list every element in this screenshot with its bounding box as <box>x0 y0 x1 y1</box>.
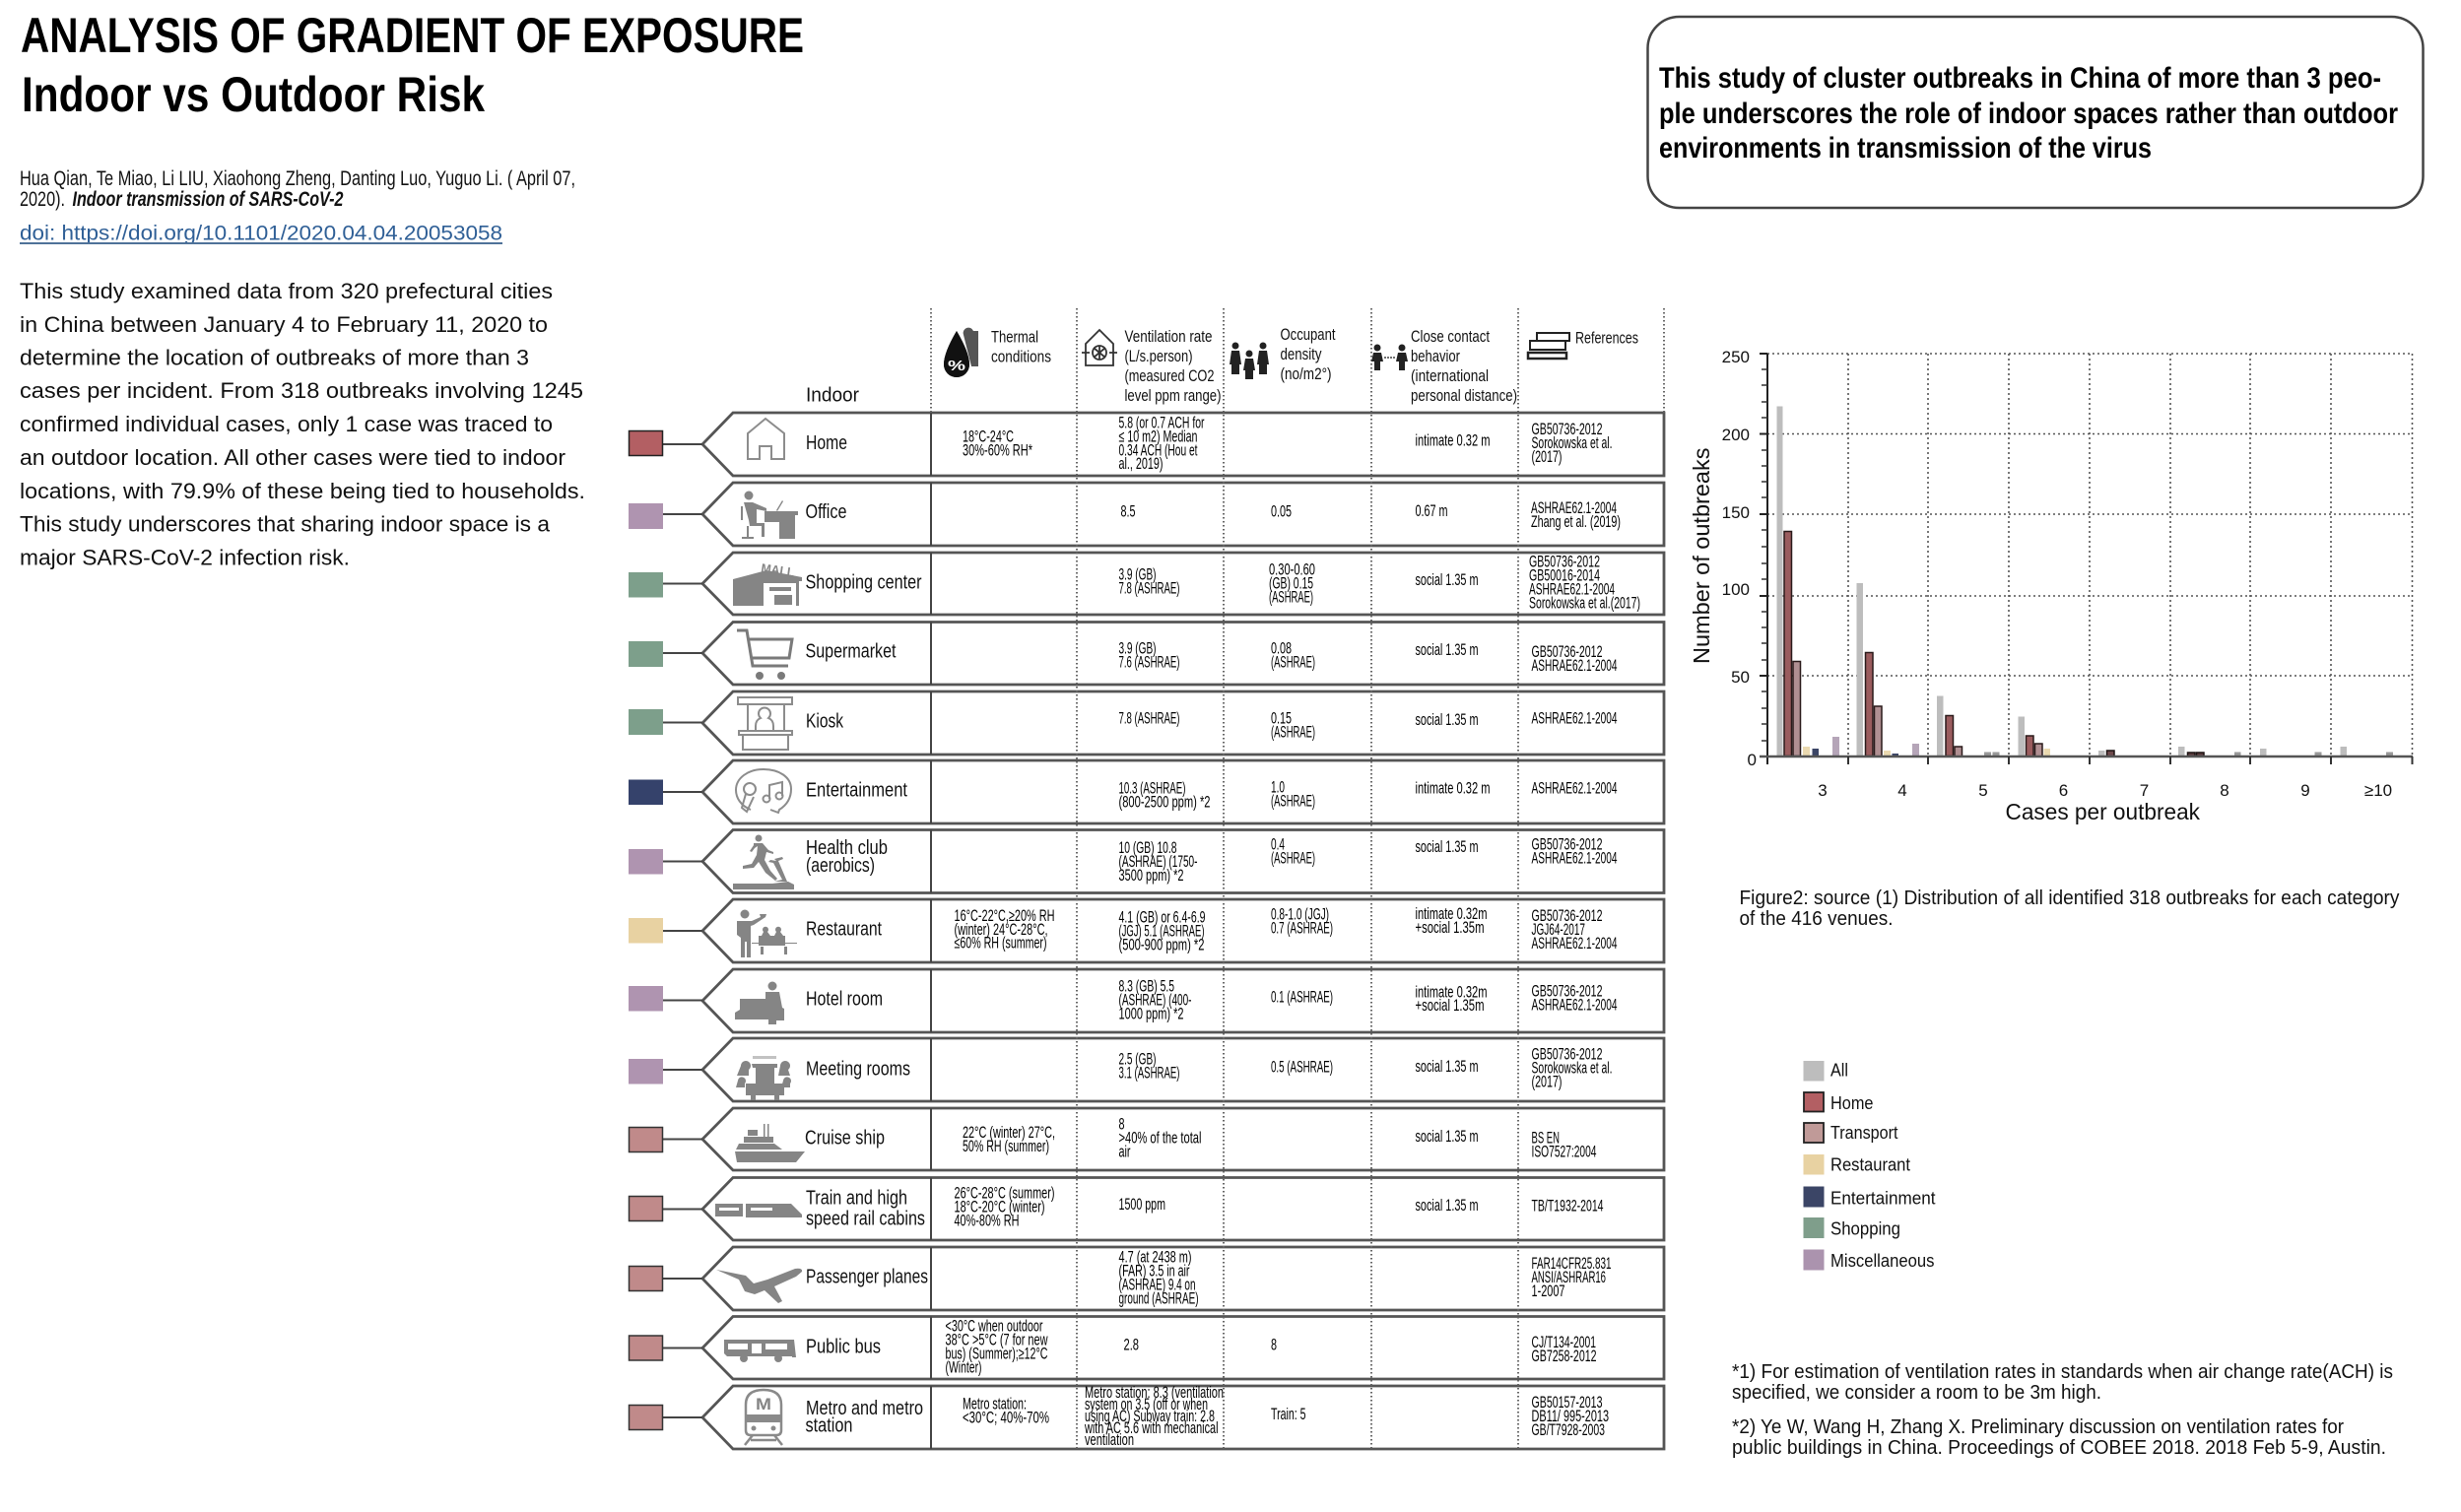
row: metro and metro station: Train: 5 <box>1271 1406 1306 1423</box>
y axis labels: 250 <box>1722 348 1750 366</box>
row: passenger planes: FAR14CFR25.831 <box>1531 1255 1612 1273</box>
row: train and high speed rail cabins: 18°C-20°C (winter) <box>954 1198 1044 1216</box>
header: occupant density: density <box>1281 345 1322 363</box>
header: thermal conditions <box>991 327 1051 366</box>
row: home: 30%-60% RH* <box>963 441 1032 459</box>
figure caption: of the 416 venues. <box>1740 908 1894 930</box>
row: meeting rooms: Sorokowska et al. <box>1531 1060 1612 1078</box>
title <box>21 8 804 122</box>
x axis labels: ≥10 <box>2364 781 2392 800</box>
bars: 7 cases <box>2098 751 2114 756</box>
row: kiosk: 7.8 (ASHRAE) <box>1119 709 1180 727</box>
row: metro and metro station <box>629 1384 1664 1449</box>
row: office: 0.05 <box>1271 502 1292 520</box>
y axis labels: 200 <box>1722 426 1750 444</box>
row: supermarket: social 1.35 m <box>1415 641 1478 659</box>
text block: study summary: determine the location of outbreaks of more than 3 <box>20 345 529 370</box>
text block: study summary: major SARS-CoV-2 infection risk. <box>20 546 350 569</box>
row: passenger planes: ANSI/ASHRAR16 <box>1531 1269 1606 1286</box>
header: thermal conditions: Thermal <box>991 327 1038 347</box>
row: public bus: bus) (Summer);≥12°C <box>946 1346 1048 1363</box>
row: office: Office <box>806 501 847 523</box>
row: shopping center: Shopping center <box>806 571 922 593</box>
row: entertainment: Entertainment <box>806 780 907 802</box>
row: supermarket: 7.6 (ASHRAE) <box>1119 654 1180 672</box>
row: restaurant: JGJ64-2017 <box>1531 921 1585 939</box>
header: references: References <box>1575 329 1638 347</box>
row: shopping center: MALL <box>761 560 795 580</box>
bar chart: outbreaks by cases per outbreak <box>1689 348 2413 824</box>
row: metro and metro station: DB11/ 995-2013 <box>1531 1408 1609 1425</box>
x axis labels: 7 <box>2140 781 2149 800</box>
row: shopping center: social 1.35 m <box>1415 571 1478 589</box>
row: entertainment: 10.3 (ASHRAE) <box>1119 780 1186 798</box>
row: passenger planes: ground (ASHRAE) <box>1119 1290 1198 1308</box>
row: kiosk: (ASHRAE) <box>1271 723 1315 741</box>
row: restaurant: GB50736-2012 <box>1531 907 1602 925</box>
row: train and high speed rail cabins: speed rail cabins <box>806 1208 925 1229</box>
row: metro and metro station: GB50157-2013 <box>1531 1394 1602 1412</box>
row: meeting rooms: 2.5 (GB) <box>1119 1050 1157 1068</box>
header: ventilation rate: (measured CO2 <box>1125 366 1214 385</box>
row: hotel room: intimate 0.32m <box>1415 983 1488 1001</box>
title: Indoor vs Outdoor Risk <box>22 67 485 122</box>
row: supermarket: 3.9 (GB) <box>1119 640 1157 658</box>
row: entertainment: 1.0 <box>1271 778 1285 796</box>
row: metro and metro station: <30°C; 40%-70% <box>963 1409 1049 1426</box>
legend <box>1803 1060 1935 1271</box>
row: home: 5.8 (or 0.7 ACH for <box>1119 414 1205 431</box>
row: restaurant: +social 1.35m <box>1415 919 1484 937</box>
header: ventilation rate: (L/s.person) <box>1125 347 1192 365</box>
row: hotel room: (ASHRAE) (400- <box>1119 991 1192 1009</box>
footnote 2: *2) Ye W, Wang H, Zhang X. Preliminary discussion on ventilation rates for <box>1732 1416 2344 1438</box>
row: shopping center: ASHRAE62.1-2004 <box>1529 581 1615 599</box>
row: home: al., 2019) <box>1119 455 1163 473</box>
row: health club: 10 (GB) 10.8 <box>1119 839 1176 857</box>
row: train and high speed rail cabins <box>629 1178 1664 1240</box>
footnote 1: *1) For estimation of ventilation rates in standards when air change rate(ACH) is <box>1732 1361 2393 1383</box>
row: entertainment: ASHRAE62.1-2004 <box>1531 780 1618 798</box>
row: meeting rooms: (2017) <box>1531 1074 1563 1091</box>
citation: 2020). <box>20 188 65 211</box>
icon: thermal conditions: % <box>948 358 965 374</box>
footnote 2: public buildings in China. Proceedings of COBEE 2018. 2018 Feb 5-9, Austin. <box>1732 1437 2386 1459</box>
bars: 4 cases <box>1856 583 1919 756</box>
text block: study summary: an outdoor location. All other cases were tied to indoor <box>20 445 566 470</box>
row: public bus: 38°C >5°C (7 for new <box>946 1332 1048 1349</box>
icon: books <box>1528 333 1569 359</box>
row: restaurant: intimate 0.32m <box>1415 905 1488 923</box>
row: restaurant <box>629 899 1664 962</box>
row: health club: (aerobics) <box>806 855 875 877</box>
row: home: 0.34 ACH (Hou et <box>1119 441 1198 459</box>
row: shopping center: 3.9 (GB) <box>1119 565 1157 583</box>
row: cruise ship: 50% RH (summer) <box>963 1138 1049 1155</box>
row: home: Home <box>806 432 847 454</box>
row: cruise ship: BS EN <box>1531 1129 1560 1147</box>
row: metro and metro station: with AC 5.6 with mechanical <box>1084 1419 1218 1437</box>
row: kiosk: 0.15 <box>1271 709 1292 727</box>
row: hotel room: 8.3 (GB) 5.5 <box>1119 977 1174 995</box>
row: train and high speed rail cabins: Train and high <box>806 1188 907 1210</box>
row: metro and metro station: Metro and metro <box>806 1398 923 1419</box>
row: passenger planes: (ASHRAE) 9.4 on <box>1119 1277 1196 1294</box>
header: occupant density <box>1281 325 1336 383</box>
legend item: shopping: Shopping <box>1830 1219 1900 1239</box>
row: hotel room: Hotel room <box>806 989 883 1011</box>
header: close contact behavior: personal distance) <box>1411 386 1517 405</box>
row: metro and metro station: GB/T7928-2003 <box>1531 1421 1605 1439</box>
row: public bus: <30°C when outdoor <box>946 1318 1043 1336</box>
row: train and high speed rail cabins: social 1.35 m <box>1415 1197 1478 1215</box>
header: thermal conditions: conditions <box>991 347 1051 366</box>
row: public bus: GB7258-2012 <box>1531 1348 1596 1365</box>
legend item: all: All <box>1830 1060 1848 1080</box>
row: restaurant: 0.7 (ASHRAE) <box>1271 920 1333 938</box>
citation <box>20 167 575 211</box>
bars: 3 cases <box>1777 406 1839 756</box>
figure caption <box>1740 887 2400 930</box>
row: health club: 0.4 <box>1271 835 1285 853</box>
row: shopping center: 7.8 (ASHRAE) <box>1119 579 1180 597</box>
row: supermarket: GB50736-2012 <box>1531 643 1602 661</box>
footnote 1: specified, we consider a room to be 3m high. <box>1732 1382 2101 1404</box>
row: restaurant: (500-900 ppm) *2 <box>1119 936 1204 953</box>
row: cruise ship <box>629 1108 1664 1170</box>
row: office: 8.5 <box>1121 502 1135 520</box>
row: restaurant: ASHRAE62.1-2004 <box>1531 935 1618 953</box>
footnote 1 <box>1732 1361 2393 1404</box>
footnote 2 <box>1732 1416 2386 1459</box>
row: restaurant: 16°C-22°C,≥20% RH <box>954 907 1054 925</box>
header: ventilation rate: Ventilation rate <box>1125 327 1212 346</box>
legend item: all <box>1803 1060 1848 1082</box>
legend item: restaurant: Restaurant <box>1830 1154 1910 1174</box>
row: restaurant: 4.1 (GB) or 6.4-6.9 <box>1119 908 1206 926</box>
row: supermarket: 0.08 <box>1271 640 1292 658</box>
row: meeting rooms: 0.5 (ASHRAE) <box>1271 1058 1333 1076</box>
row: train and high speed rail cabins: TB/T1932-2014 <box>1531 1198 1604 1216</box>
legend item: shopping <box>1803 1217 1900 1239</box>
text block: study summary: locations, with 79.9% of these being tied to households. <box>20 479 585 503</box>
bars: 8 cases <box>2178 747 2240 756</box>
row: public bus: CJ/T134-2001 <box>1531 1334 1596 1351</box>
row: hotel room: 1000 ppm) *2 <box>1119 1005 1184 1022</box>
row: kiosk: Kiosk <box>806 711 844 733</box>
row: passenger planes <box>629 1247 1664 1310</box>
row: meeting rooms: Meeting rooms <box>806 1058 910 1080</box>
row: shopping center: 0.30-0.60 <box>1269 561 1315 579</box>
row: cruise ship: air <box>1119 1143 1131 1160</box>
row: home: ≤ 10 m2) Median <box>1119 427 1198 445</box>
header: close contact behavior <box>1411 327 1517 405</box>
header: close contact behavior: (international <box>1411 366 1489 385</box>
icon: close contact <box>1371 345 1408 370</box>
row: cruise ship: social 1.35 m <box>1415 1128 1478 1146</box>
row: restaurant: (winter) 24°C-28°C, <box>954 921 1048 939</box>
row: public bus: 2.8 <box>1123 1336 1139 1353</box>
citation: Indoor transmission of SARS-CoV-2 <box>73 188 344 211</box>
row: metro and metro station: ventilation <box>1085 1431 1134 1449</box>
x axis labels: 3 <box>1818 781 1828 800</box>
row: meeting rooms: 3.1 (ASHRAE) <box>1119 1064 1180 1082</box>
row: entertainment: (ASHRAE) <box>1271 792 1315 810</box>
row: home: Sorokowska et al. <box>1531 434 1612 452</box>
row: meeting rooms <box>629 1038 1664 1101</box>
x axis title: Cases per outbreak <box>2006 799 2200 824</box>
row: restaurant: Restaurant <box>806 918 882 940</box>
row: supermarket: (ASHRAE) <box>1271 654 1315 672</box>
x axis labels: 6 <box>2059 781 2068 800</box>
row: shopping center <box>629 553 1664 615</box>
row: public bus: Public bus <box>806 1336 881 1357</box>
row: kiosk: social 1.35 m <box>1415 711 1478 729</box>
header: close contact behavior: behavior <box>1411 347 1460 365</box>
row: restaurant: (JGJ) 5.1 (ASHRAE) <box>1119 922 1204 940</box>
row: kiosk <box>629 691 1664 755</box>
row: kiosk: ASHRAE62.1-2004 <box>1531 709 1618 727</box>
legend item: miscellaneous <box>1803 1249 1935 1271</box>
row: cruise ship: >40% of the total <box>1119 1129 1202 1147</box>
row: supermarket: Supermarket <box>806 640 897 662</box>
row: restaurant: ≤60% RH (summer) <box>954 934 1046 952</box>
row: shopping center: GB50016-2014 <box>1529 567 1600 585</box>
icon: occupants <box>1230 343 1269 379</box>
callout <box>1647 17 2424 208</box>
row: cruise ship: Cruise ship <box>805 1127 885 1149</box>
row: restaurant: 0.8-1.0 (JGJ) <box>1271 906 1329 924</box>
row: passenger planes: (FAR) 3.5 in air <box>1119 1263 1190 1281</box>
text block: study summary <box>20 279 585 569</box>
row: home <box>629 413 1664 476</box>
row: health club: (ASHRAE) (1750- <box>1119 853 1198 871</box>
row: home: GB50736-2012 <box>1531 421 1602 438</box>
row: health club: ASHRAE62.1-2004 <box>1531 849 1618 867</box>
row: cruise ship: ISO7527:2004 <box>1531 1143 1596 1160</box>
bars: 10 or more cases <box>2341 747 2393 756</box>
text block: study summary: This study examined data from 320 prefectural cities <box>20 279 553 303</box>
row: home: intimate 0.32 m <box>1415 431 1490 449</box>
x axis labels: 8 <box>2220 781 2229 800</box>
text block: study summary: cases per incident. From 318 outbreaks involving 1245 <box>20 378 583 403</box>
legend item: entertainment <box>1803 1186 1935 1208</box>
row: office: Zhang et al. (2019) <box>1531 513 1621 531</box>
row: office: 0.67 m <box>1415 502 1448 520</box>
icon: ventilation house <box>1082 330 1117 365</box>
citation: Hua Qian, Te Miao, Li LIU, Xiaohong Zheng, Danting Luo, Yuguo Li. ( April 07, <box>20 167 575 190</box>
bars: 6 cases <box>2018 717 2050 756</box>
row: metro and metro station: Metro station: 8.3 (ventilation <box>1085 1384 1224 1402</box>
header: ventilation rate <box>1125 327 1222 405</box>
row: hotel room <box>629 969 1664 1032</box>
row: metro and metro station: station <box>806 1414 853 1436</box>
row: home: 18°C-24°C <box>963 427 1014 445</box>
figure caption: Figure2: source (1) Distribution of all identified 318 outbreaks for each category <box>1740 887 2400 909</box>
x axis labels: 5 <box>1978 781 1988 800</box>
legend item: transport <box>1804 1123 1897 1143</box>
legend item: entertainment: Entertainment <box>1830 1188 1935 1208</box>
header: close contact behavior: Close contact <box>1411 327 1490 346</box>
legend item: transport: Transport <box>1830 1123 1897 1143</box>
row: entertainment: intimate 0.32 m <box>1415 780 1490 798</box>
row: shopping center: (ASHRAE) <box>1269 589 1313 607</box>
legend item: restaurant <box>1803 1154 1910 1174</box>
row: passenger planes: Passenger planes <box>806 1267 928 1288</box>
row: shopping center: (GB) 0.15 <box>1269 575 1313 593</box>
row: train and high speed rail cabins: 26°C-28°C (summer) <box>954 1184 1054 1202</box>
axes <box>1760 354 2413 764</box>
row: cruise ship: 8 <box>1119 1115 1125 1133</box>
row: metro and metro station: M <box>756 1395 771 1413</box>
row: metro and metro station: Metro station: <box>963 1395 1027 1413</box>
row: public bus <box>629 1316 1664 1379</box>
row: public bus: (Winter) <box>946 1359 981 1377</box>
row: health club <box>629 829 1664 892</box>
row: hotel room: ASHRAE62.1-2004 <box>1531 997 1618 1015</box>
x axis labels: 9 <box>2300 781 2310 800</box>
row: train and high speed rail cabins: 1500 ppm <box>1119 1196 1165 1214</box>
bars: 9 cases <box>2260 749 2321 756</box>
bars: 5 cases <box>1937 695 2000 756</box>
text block: study summary: confirmed individual cases, only 1 case was traced to <box>20 412 553 436</box>
row: entertainment: (800-2500 ppm) *2 <box>1119 794 1210 812</box>
title: ANALYSIS OF GRADIENT OF EXPOSURE <box>21 8 804 63</box>
row: meeting rooms: social 1.35 m <box>1415 1058 1478 1076</box>
header: ventilation rate: level ppm range) <box>1125 386 1222 405</box>
legend item: home: Home <box>1830 1093 1874 1113</box>
row: hotel room: +social 1.35m <box>1415 997 1484 1015</box>
row: office: ASHRAE62.1-2004 <box>1531 499 1617 517</box>
row: health club: 3500 ppm) *2 <box>1119 867 1184 885</box>
icon: thermal conditions <box>944 328 978 377</box>
row: health club: GB50736-2012 <box>1531 835 1602 853</box>
y axis labels <box>1722 348 1757 769</box>
x axis labels: 4 <box>1897 781 1907 800</box>
row: entertainment <box>629 760 1664 823</box>
header: occupant density: Occupant <box>1281 325 1336 344</box>
y axis title: Number of outbreaks <box>1689 447 1714 664</box>
row: cruise ship: 22°C (winter) 27°C, <box>963 1124 1055 1142</box>
row: health club: (ASHRAE) <box>1271 849 1315 867</box>
row: metro and metro station: system on 3.5 (off or when <box>1085 1396 1208 1413</box>
row: passenger planes: 4.7 (at 2438 m) <box>1119 1249 1192 1267</box>
row: train and high speed rail cabins: 40%-80% RH <box>954 1212 1019 1229</box>
callout: environments in transmission of the virus <box>1659 132 2152 164</box>
legend item: home <box>1804 1092 1874 1113</box>
row: shopping center: GB50736-2012 <box>1529 554 1600 571</box>
text block: study summary: in China between January 4 to February 11, 2020 to <box>20 312 548 337</box>
row: shopping center: Sorokowska et al.(2017) <box>1529 595 1640 613</box>
doi link: doi: https://doi.org/10.1101/2020.04.04.20053058 <box>20 223 502 244</box>
heading: indoor: Indoor <box>806 384 859 406</box>
row: supermarket <box>629 623 1664 685</box>
row: public bus: 8 <box>1271 1336 1277 1353</box>
row: health club: social 1.35 m <box>1415 838 1478 856</box>
text block: study summary: This study underscores that sharing indoor space is a <box>20 512 550 536</box>
row: home: (2017) <box>1531 448 1563 466</box>
row: supermarket: ASHRAE62.1-2004 <box>1531 657 1618 675</box>
row: hotel room: 0.1 (ASHRAE) <box>1271 989 1333 1007</box>
row: health club: Health club <box>806 837 888 859</box>
row: hotel room: GB50736-2012 <box>1531 983 1602 1001</box>
row: office <box>629 483 1664 546</box>
x axis labels <box>1818 781 2392 800</box>
y axis labels: 100 <box>1722 580 1750 599</box>
y axis labels: 50 <box>1731 668 1750 687</box>
y axis labels: 0 <box>1748 751 1757 769</box>
row: metro and metro station: using AC) Subway train: 2.8 <box>1085 1408 1215 1425</box>
y axis labels: 150 <box>1722 503 1750 522</box>
row: meeting rooms: GB50736-2012 <box>1531 1046 1602 1064</box>
legend item: miscellaneous: Miscellaneous <box>1830 1251 1935 1271</box>
header: occupant density: (no/m2°) <box>1281 364 1332 383</box>
panel: indoor exposure table <box>629 308 1664 1449</box>
row: passenger planes: 1-2007 <box>1531 1282 1564 1300</box>
